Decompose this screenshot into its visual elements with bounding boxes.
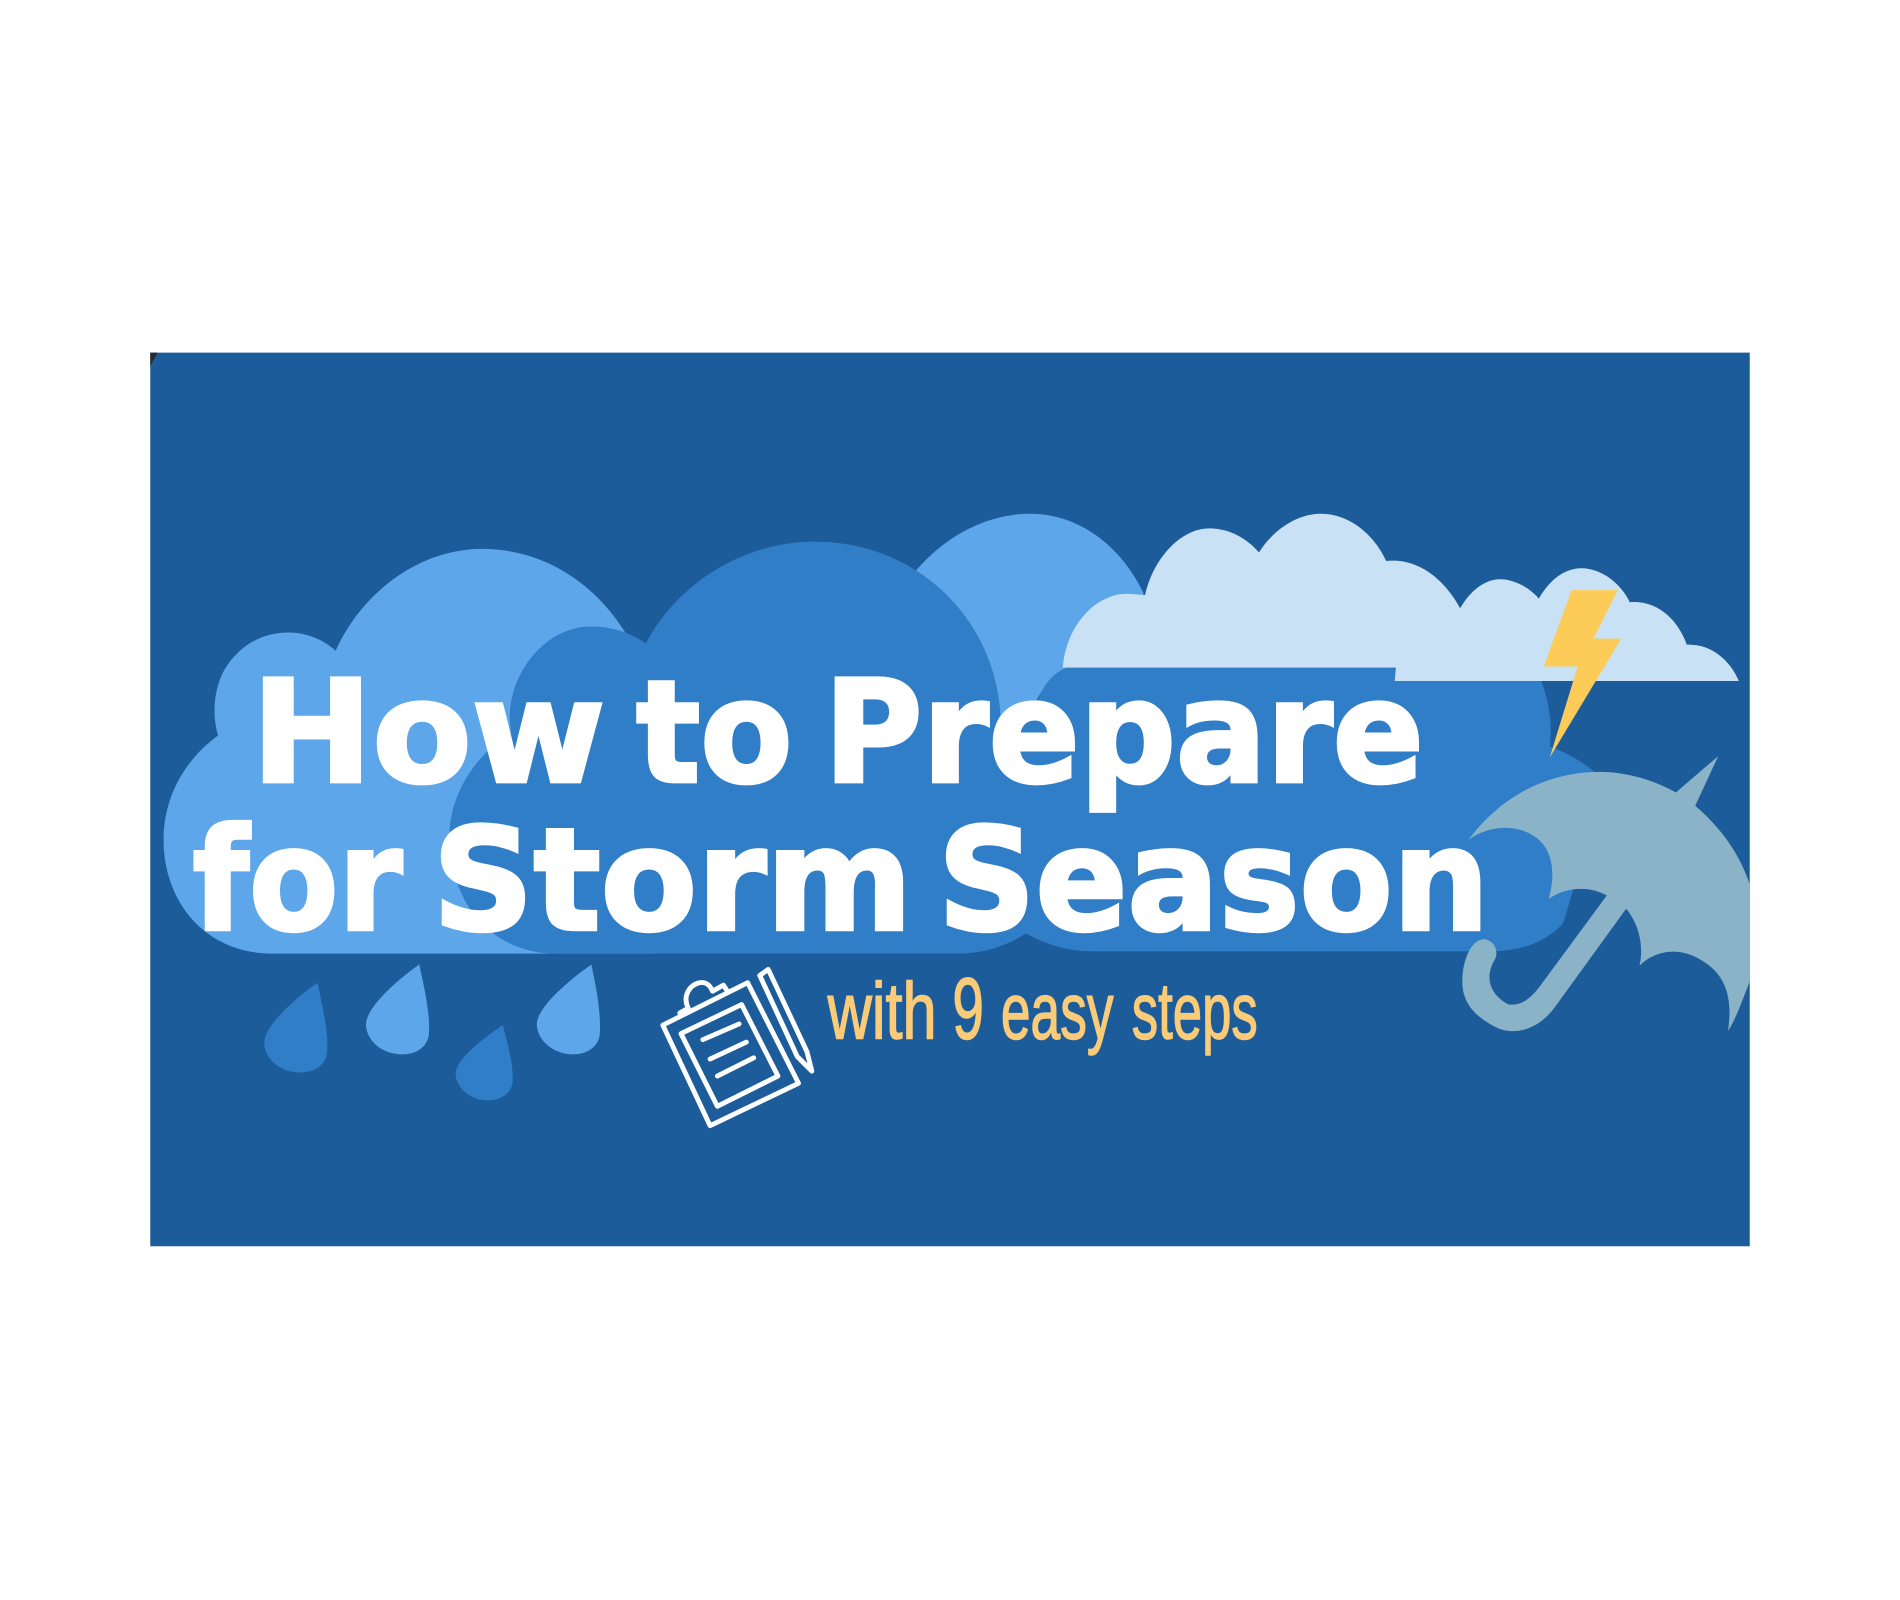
subtitle: steps — [1132, 966, 1258, 1055]
title: How — [251, 651, 605, 816]
clouds: front layer, mid blue — [450, 542, 1606, 954]
icon: lightning bolt — [1544, 590, 1621, 757]
title: Season — [938, 798, 1489, 963]
icon: umbrella — [1462, 756, 1750, 1031]
icon: rain drops — [264, 965, 600, 1100]
clouds: back layer, light blue — [164, 514, 1144, 954]
title: for — [193, 798, 402, 963]
title: to — [636, 651, 792, 816]
icon: clipboard and pencil — [663, 969, 812, 1126]
cloud: pale storm cloud — [1063, 514, 1739, 681]
subtitle: 9 — [952, 960, 984, 1057]
panel: blue background — [150, 353, 1750, 1246]
title: Storm — [433, 798, 912, 963]
subtitle — [827, 960, 1258, 1057]
subtitle: easy — [1001, 966, 1114, 1055]
title — [193, 651, 1489, 963]
title: Prepare — [824, 651, 1424, 816]
subtitle: with — [827, 966, 937, 1055]
